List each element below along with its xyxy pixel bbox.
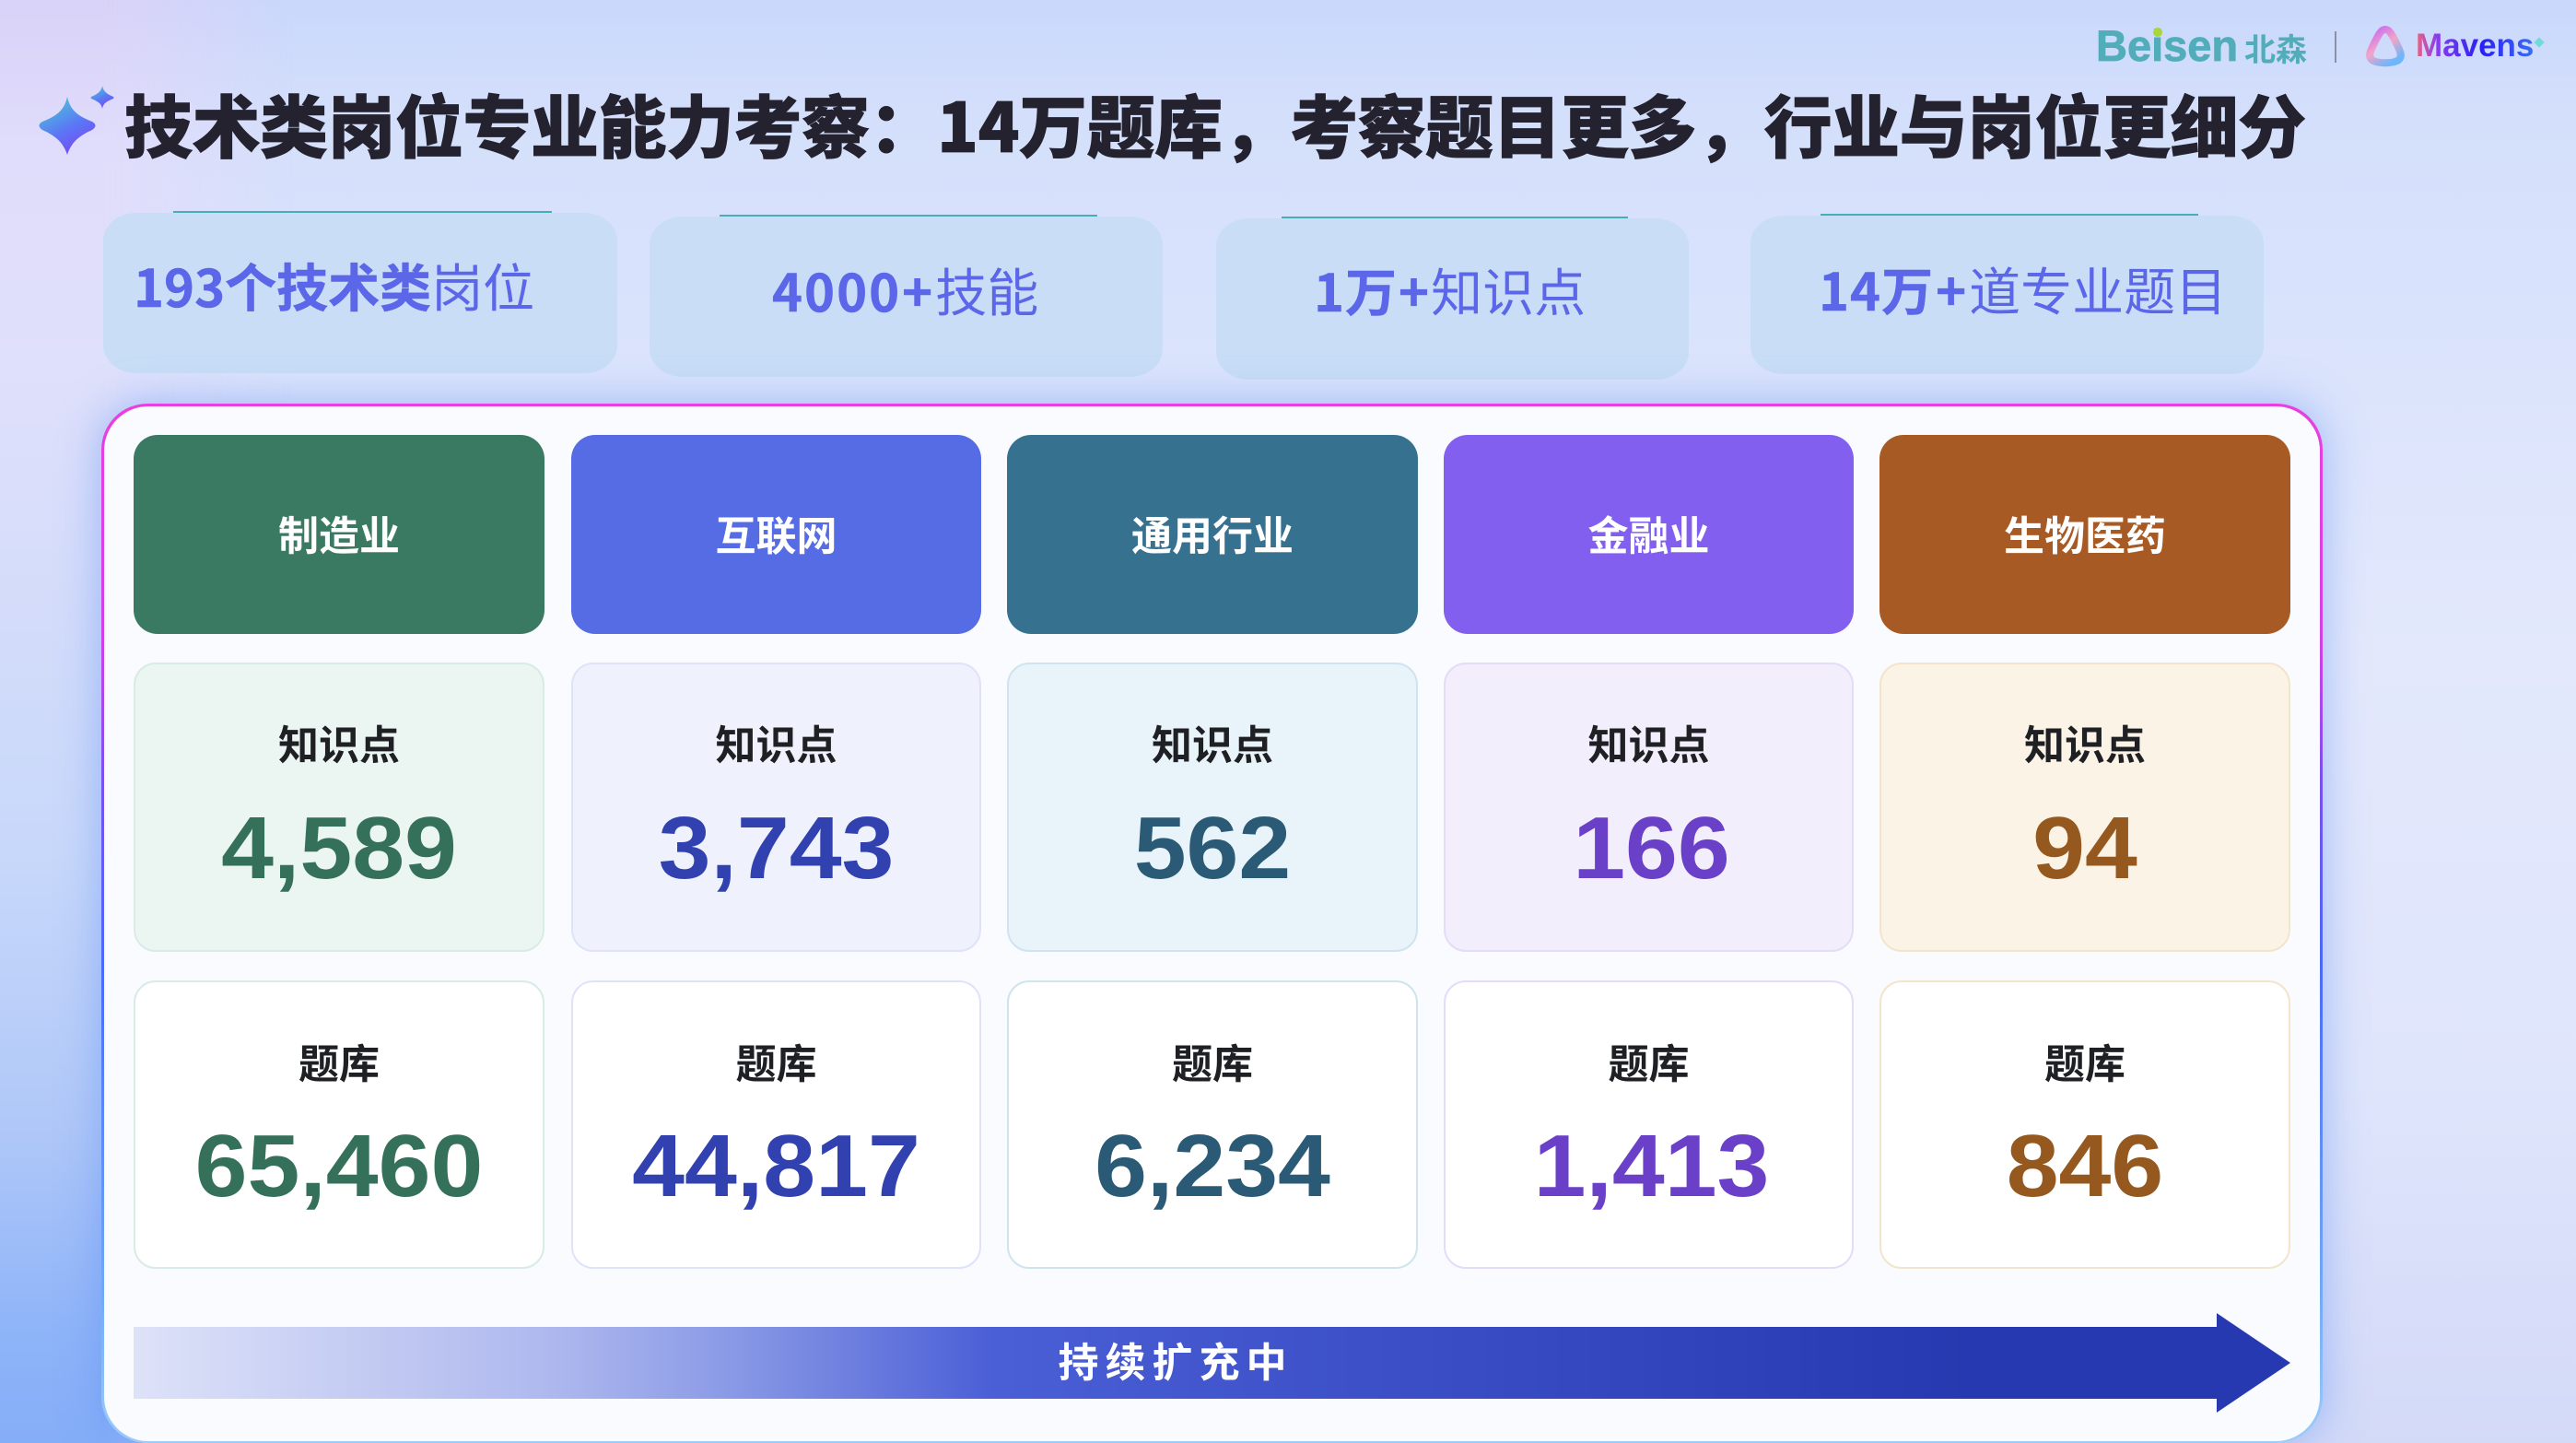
header: general industry — [1007, 435, 1418, 634]
knowledge points: biomedical: 知识点 — [2024, 723, 2146, 768]
logo: Mavens wordmark: Mavens — [2416, 28, 2534, 64]
stat card: 10k knowledge points — [1216, 218, 1689, 380]
knowledge points: internet: 知识点 — [715, 723, 837, 768]
question bank: biomedical — [1879, 980, 2290, 1269]
question bank: finance: 1,413 — [1534, 1117, 1769, 1215]
stat card: 193 positions — [103, 213, 617, 373]
card accent line 2 — [720, 215, 1097, 217]
card accent line 4 — [1821, 214, 2198, 216]
header: internet — [571, 435, 981, 634]
panel: industry table — [101, 404, 2323, 1443]
panel inner fill — [104, 406, 2320, 1441]
logo: Beisen: 北森 — [2244, 33, 2307, 68]
question bank: manufacturing — [134, 980, 544, 1269]
knowledge points: general: 562 — [1134, 799, 1291, 897]
header: general industry: 通用行业 — [1131, 514, 1294, 559]
question bank: internet: 题库 — [735, 1042, 816, 1087]
header: manufacturing: 制造业 — [278, 514, 400, 559]
arrow: continuously expanding: 持续扩充中 — [1058, 1341, 1294, 1386]
header: internet: 互联网 — [715, 514, 837, 559]
title: 技术类岗位专业能力考察：14万题库，考察题目更多，行业与岗位更细分 — [124, 74, 2306, 172]
logo divider — [2335, 31, 2336, 63]
question bank: biomedical: 题库 — [2044, 1042, 2125, 1087]
knowledge points: biomedical: 94 — [2032, 799, 2137, 897]
icon: Mavens sparkle — [2534, 37, 2545, 48]
question bank: manufacturing: 65,460 — [195, 1117, 483, 1215]
stat card: 4000+ skills: 4000+技能 — [772, 252, 1038, 327]
card accent line 1 — [173, 211, 552, 213]
stat card: 193 positions: 193个技术类岗位 — [134, 248, 534, 323]
logo: Beisen — [2096, 21, 2307, 70]
logo: Beisen: Beisen — [2096, 21, 2238, 70]
question bank: general: 题库 — [1172, 1042, 1253, 1087]
knowledge points: finance: 知识点 — [1588, 723, 1710, 768]
arrow: continuously expanding — [134, 1313, 2290, 1413]
card accent line 3 — [1282, 217, 1628, 218]
knowledge points: internet: 3,743 — [659, 799, 894, 897]
stat card: 140k questions: 14万+道专业题目 — [1819, 252, 2227, 326]
knowledge points: manufacturing — [134, 663, 544, 952]
header: finance: 金融业 — [1588, 514, 1710, 559]
question bank: internet — [571, 980, 981, 1269]
question bank: biomedical: 846 — [2007, 1117, 2163, 1215]
knowledge points: internet — [571, 663, 981, 952]
knowledge points: manufacturing: 4,589 — [221, 799, 457, 897]
knowledge points: manufacturing: 知识点 — [278, 723, 400, 768]
question bank: internet: 44,817 — [632, 1117, 920, 1215]
question bank: general — [1007, 980, 1418, 1269]
knowledge points: biomedical — [1879, 663, 2290, 952]
icon: sparkle — [39, 86, 114, 155]
header: biomedical — [1879, 435, 2290, 634]
stat card: 10k knowledge points: 1万+知识点 — [1314, 252, 1586, 327]
knowledge points: general — [1007, 663, 1418, 952]
header: biomedical: 生物医药 — [2004, 514, 2166, 559]
knowledge points: general: 知识点 — [1152, 723, 1273, 768]
stat card: 4000+ skills — [650, 217, 1163, 377]
knowledge points: finance — [1444, 663, 1854, 952]
header: manufacturing — [134, 435, 544, 634]
logo: Mavens icon — [2366, 26, 2405, 66]
question bank: finance: 题库 — [1609, 1042, 1690, 1087]
background left wash — [0, 0, 195, 1443]
stat card: 140k questions — [1751, 216, 2264, 374]
question bank: finance — [1444, 980, 1854, 1269]
knowledge points: finance: 166 — [1573, 799, 1730, 897]
question bank: manufacturing: 题库 — [299, 1042, 380, 1087]
header: finance — [1444, 435, 1854, 634]
question bank: general: 6,234 — [1095, 1117, 1330, 1215]
